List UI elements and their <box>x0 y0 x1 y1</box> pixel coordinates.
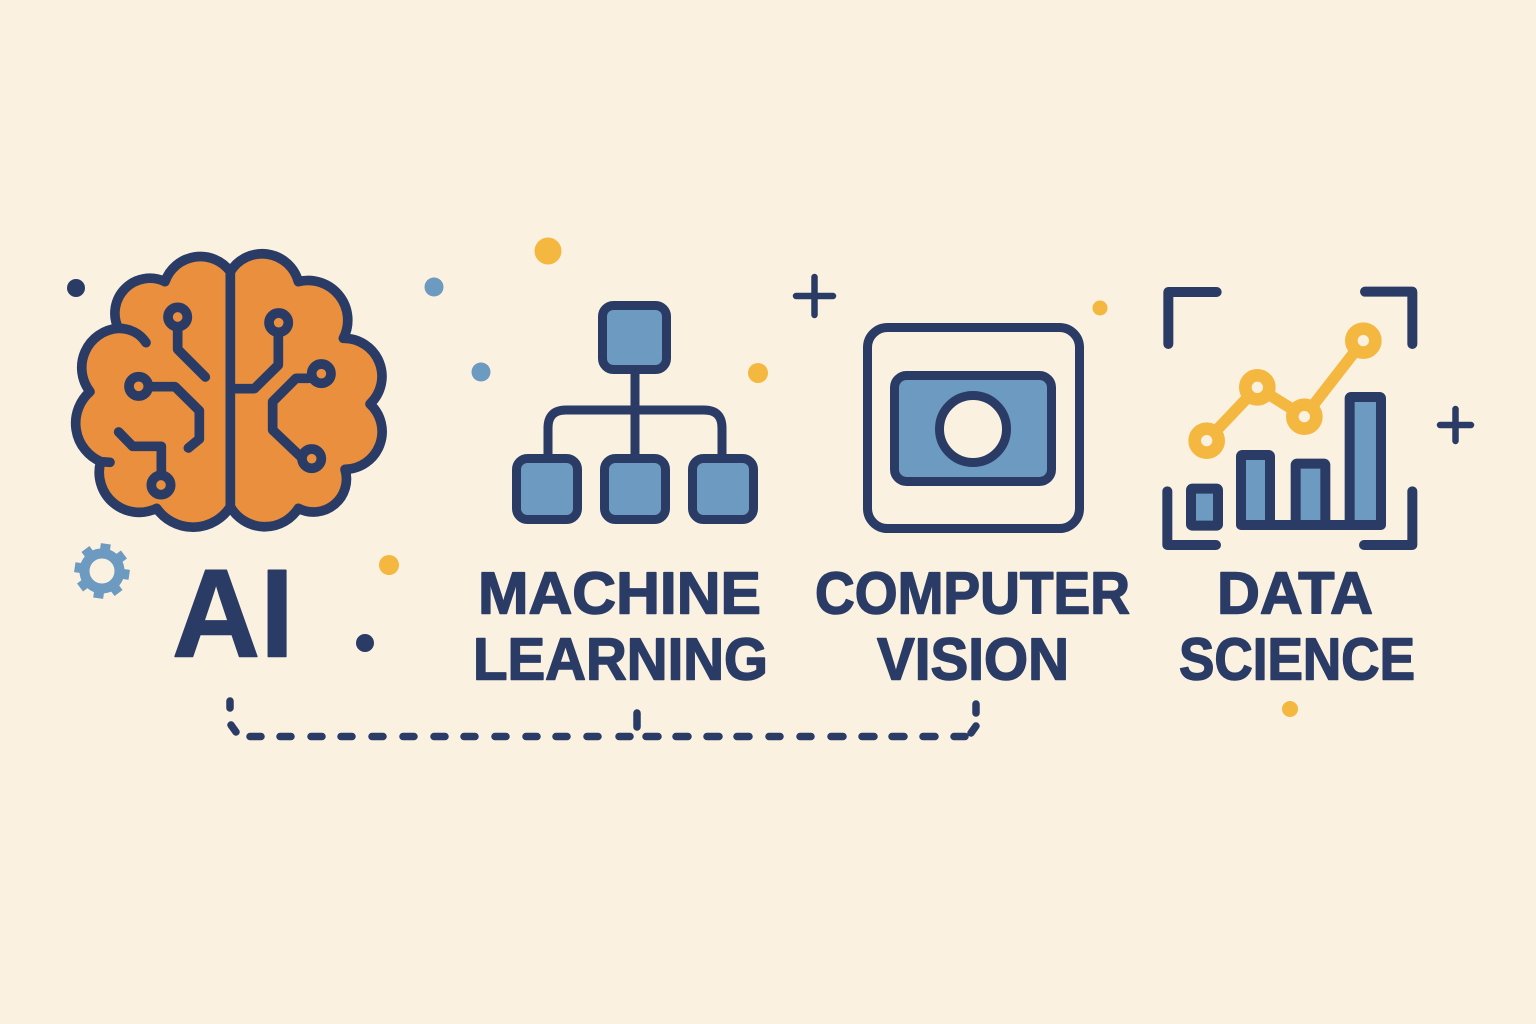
icon: computer vision frame <box>868 328 1080 528</box>
lens <box>940 396 1006 462</box>
plus sign near computer vision <box>796 277 833 315</box>
heading: Machine Learning: MACHINE <box>478 560 761 626</box>
bottom node left <box>516 458 578 520</box>
heading: Data Science: DATA <box>1217 560 1373 626</box>
heading: Data Science: SCIENCE <box>1179 626 1415 692</box>
heading: Computer Vision: VISION <box>877 626 1069 692</box>
heading: Computer Vision: COMPUTER <box>815 560 1130 626</box>
heading: Machine Learning: LEARNING <box>473 626 768 692</box>
right circuit traces <box>230 335 308 457</box>
heading: Machine Learning <box>473 560 768 692</box>
brain left hemisphere <box>76 257 230 527</box>
heading: AI: AI <box>172 544 294 684</box>
bar chart <box>1191 397 1381 526</box>
dashed connector <box>230 701 976 736</box>
bottom node right <box>692 458 754 520</box>
trend line <box>1195 329 1375 453</box>
icon: gear <box>74 543 130 599</box>
decorative dots <box>67 238 1298 717</box>
corner brackets <box>1167 292 1412 545</box>
outer frame <box>868 328 1080 528</box>
icon: data science chart <box>1167 292 1412 545</box>
icon: machine learning hierarchy <box>516 306 754 520</box>
left circuit traces <box>119 327 205 473</box>
bottom node middle <box>604 458 666 520</box>
heading: Computer Vision <box>815 560 1130 692</box>
top node <box>602 306 666 370</box>
icon: brain with circuits <box>76 254 382 527</box>
heading: Data Science <box>1179 560 1415 692</box>
brain right hemisphere <box>230 254 382 527</box>
inner screen <box>894 376 1052 482</box>
left lobe folds <box>101 328 146 462</box>
plus sign near data science <box>1440 409 1471 441</box>
connector lines <box>548 370 722 456</box>
circuit nodes <box>129 307 331 495</box>
